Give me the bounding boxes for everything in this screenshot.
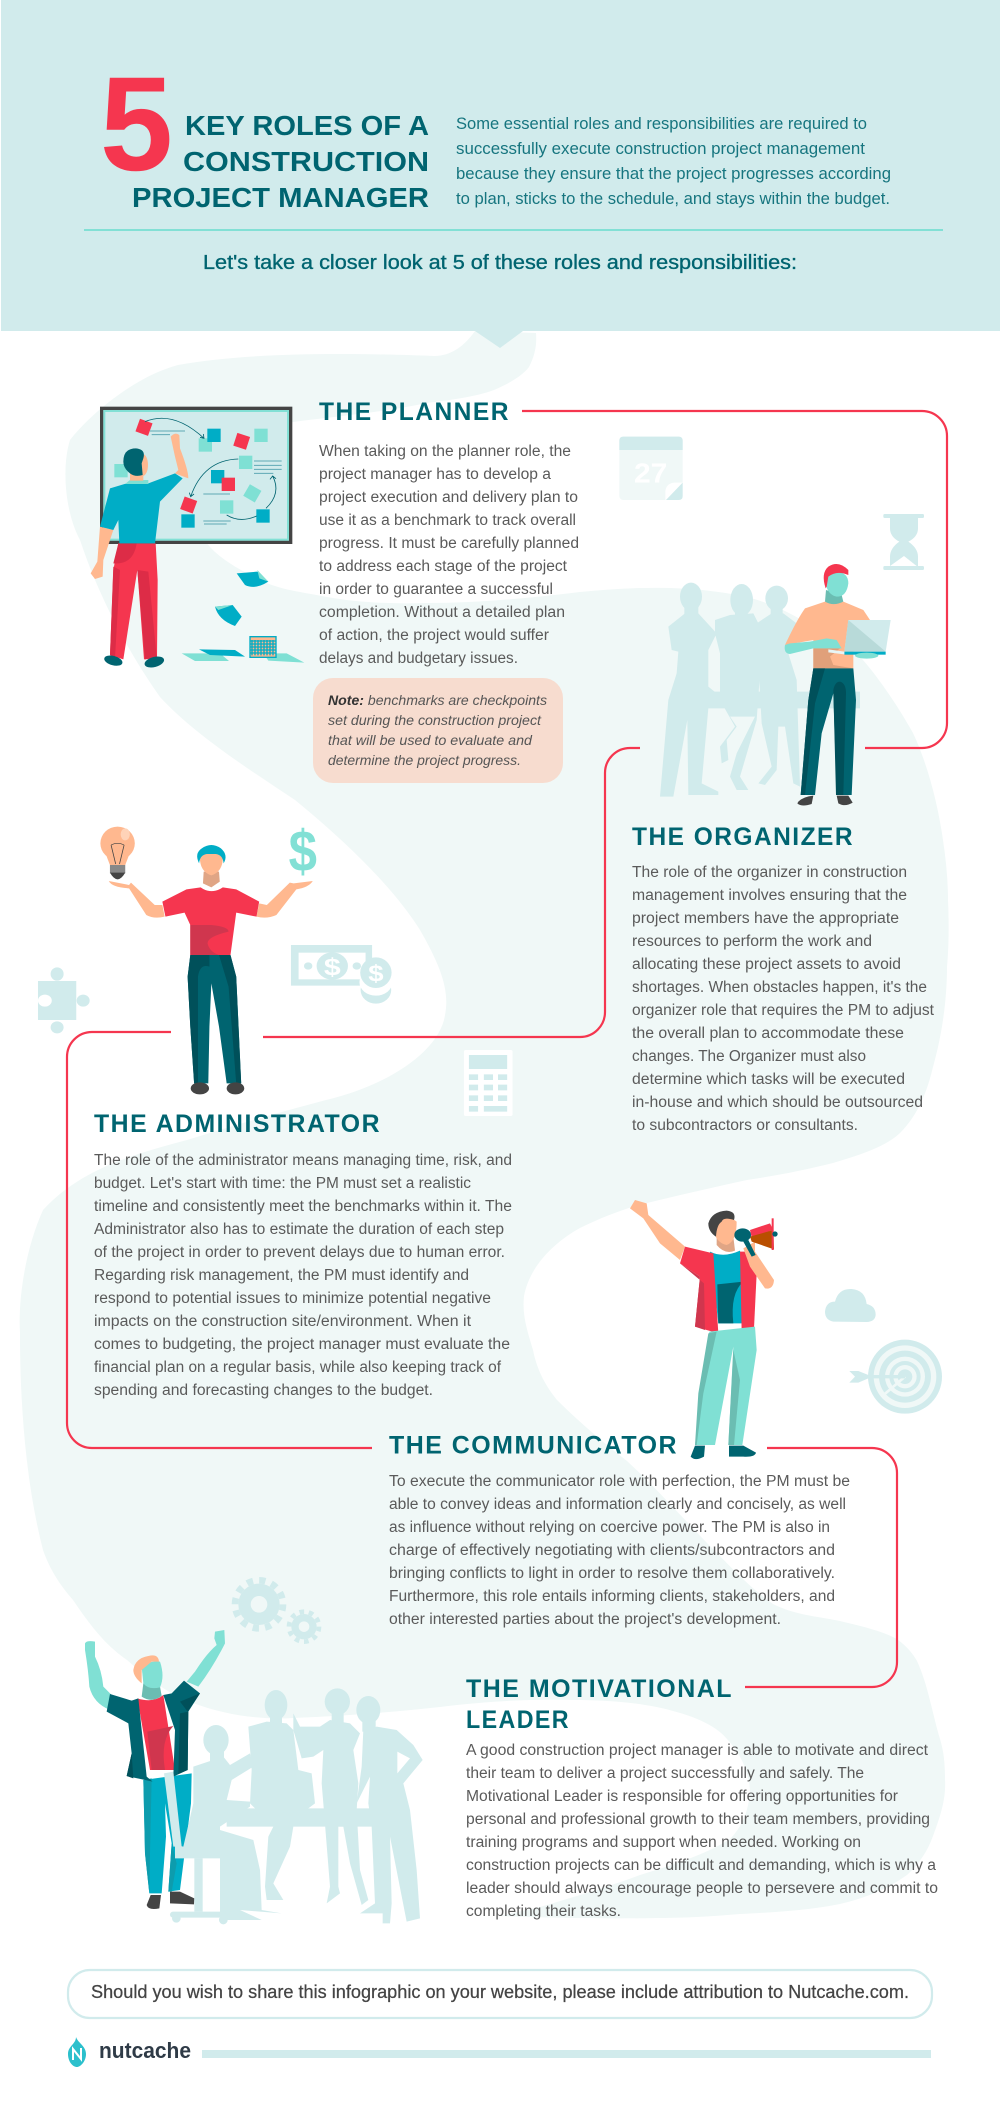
heading: the motivational leader: THE MOTIVATIONAL	[466, 1675, 733, 1703]
text: planner: delays and budgetary issues.	[319, 650, 518, 667]
text: administrator: The role of the administrator means managing time, risk, and	[94, 1152, 512, 1169]
icon: puzzle piece	[38, 967, 90, 1033]
heading: the planner: THE PLANNER	[319, 398, 510, 426]
callout: note: that will be used to evaluate and	[328, 732, 533, 748]
icon: dollar sign: $	[289, 819, 317, 884]
text: administrator: Regarding risk management, the PM must identify and	[94, 1267, 469, 1284]
text: planner: use it as a benchmark to track overall	[319, 512, 576, 529]
text: communicator: charge of effectively negotiating with clients/subcontractors and	[389, 1542, 835, 1559]
figure: organizer	[785, 564, 891, 806]
text: motivational leader: personal and professional growth to their team members, providing	[466, 1811, 930, 1828]
text: administrator	[94, 1152, 512, 1399]
text: planner	[319, 443, 579, 667]
text: organizer: organizer role that requires the PM to adjust	[632, 1002, 935, 1019]
text: organizer: management involves ensuring that the	[632, 887, 907, 904]
text: motivational leader	[466, 1742, 938, 1920]
text: administrator: budget. Let's start with time: the PM must set a realistic	[94, 1175, 471, 1192]
illustration: motivational leader group	[85, 1580, 423, 1924]
illustration: communicator group	[630, 1200, 942, 1459]
silhouettes: team	[660, 583, 860, 797]
text: motivational leader: training programs and support when needed. Working on	[466, 1834, 861, 1851]
text: communicator	[389, 1473, 850, 1628]
subtitle: Let's take a closer look at 5 of these roles and responsibilities:	[203, 252, 797, 274]
title: KEY ROLES OF A	[185, 110, 429, 141]
text: motivational leader: their team to deliver a project successfully and safely. The	[466, 1765, 864, 1782]
callout: note: Note: benchmarks are checkpoints	[328, 692, 547, 708]
icon: calendar: 27	[634, 457, 667, 488]
intro paragraph: because they ensure that the project progresses according	[456, 164, 891, 183]
text: organizer: in-house and which should be outsourced	[632, 1094, 923, 1111]
text: motivational leader: Motivational Leader is responsible for offering opportunities for	[466, 1788, 898, 1805]
text: communicator: To execute the communicator role with perfection, the PM must be	[389, 1473, 850, 1490]
text: planner: When taking on the planner role, the	[319, 443, 571, 460]
illustration: planner at board	[91, 408, 304, 669]
figure: administrator	[109, 845, 313, 1094]
icon: money and coins: $	[324, 955, 341, 981]
icon: gears	[235, 1580, 319, 1642]
intro paragraph: to plan, sticks to the schedule, and stays within the budget.	[456, 189, 890, 208]
text: organizer: to subcontractors or consultants.	[632, 1117, 858, 1134]
background blob	[20, 331, 949, 1918]
intro paragraph: Some essential roles and responsibilities are required to	[456, 114, 867, 133]
text: planner: project manager has to develop a	[319, 466, 551, 483]
icon: money and coins: $	[368, 961, 384, 987]
text: planner: in order to guarantee a successful	[319, 581, 553, 598]
figure: communicator with megaphone	[630, 1200, 778, 1459]
illustration: organizer group	[619, 437, 924, 806]
attribution box: Should you wish to share this infographic on your website, please include attribution to Nutcache.com.	[91, 1982, 909, 2002]
logo wordmark: nutcache	[99, 2038, 191, 2063]
text: administrator: timeline and consistently meet the benchmarks within it. The	[94, 1198, 512, 1215]
icon: hourglass	[883, 514, 924, 570]
text: motivational leader: leader should always encourage people to persevere and commit to	[466, 1880, 938, 1897]
text: organizer: the overall plan to accommodate these	[632, 1025, 904, 1042]
heading: the motivational leader: LEADER	[466, 1706, 570, 1734]
connector: planner to organizer	[522, 411, 947, 748]
icon: nutcache logo	[68, 2037, 86, 2067]
callout: note: set during the construction project	[328, 712, 542, 728]
text: administrator: respond to potential issues to minimize potential negative	[94, 1290, 491, 1307]
text: organizer: changes. The Organizer must also	[632, 1048, 866, 1065]
connector: administrator to communicator	[67, 1032, 372, 1448]
silhouettes: team at table	[164, 1688, 423, 1924]
text: organizer	[632, 864, 935, 1134]
title	[132, 110, 429, 213]
intro paragraph	[456, 114, 891, 208]
header band	[1, 0, 1000, 348]
text: planner: of action, the project would suffer	[319, 627, 549, 644]
heading: the organizer: THE ORGANIZER	[632, 823, 854, 851]
text: communicator: able to convey ideas and information clearly and concisely, as well	[389, 1496, 846, 1513]
text: organizer: shortages. When obstacles happen, it's the	[632, 979, 927, 996]
text: organizer: allocating these project assets to avoid	[632, 956, 901, 973]
text: planner: to address each stage of the project	[319, 558, 568, 575]
icon: cloud	[825, 1289, 876, 1322]
text: administrator: impacts on the construction site/environment. When it	[94, 1313, 472, 1330]
intro paragraph: successfully execute construction project management	[456, 139, 865, 158]
text: administrator: financial plan on a regular basis, while also keeping track of	[94, 1359, 502, 1376]
text: organizer: The role of the organizer in construction	[632, 864, 907, 881]
text: motivational leader: completing their tasks.	[466, 1903, 621, 1920]
icon: target with arrow	[849, 1340, 942, 1414]
text: administrator: of the project in order to prevent delays due to human error.	[94, 1244, 505, 1261]
heading: the motivational leader	[466, 1675, 733, 1734]
illustration: administrator group	[38, 819, 513, 1116]
callout: note	[313, 678, 563, 783]
attribution box	[68, 1970, 932, 2018]
text: communicator: as influence without relying on coercive power. The PM is also in	[389, 1519, 830, 1536]
text: communicator: bringing conflicts to light in order to resolve them collaboratively.	[389, 1565, 835, 1582]
text: motivational leader: construction projects can be difficult and demanding, which is why a	[466, 1857, 936, 1874]
text: communicator: other interested parties about the project's development.	[389, 1611, 781, 1628]
text: motivational leader: A good construction project manager is able to motivate and direct	[466, 1742, 929, 1759]
connector: organizer to administrator	[263, 748, 640, 1037]
callout: note: determine the project progress.	[328, 752, 521, 768]
text: administrator: spending and forecasting changes to the budget.	[94, 1382, 433, 1399]
title numeral 5: 5	[100, 50, 173, 199]
text: organizer: project members have the appropriate	[632, 910, 899, 927]
figure: motivational leader	[85, 1630, 225, 1909]
text: communicator: Furthermore, this role entails informing clients, stakeholders, and	[389, 1588, 835, 1605]
heading: the communicator: THE COMMUNICATOR	[389, 1432, 678, 1460]
text: administrator: Administrator also has to estimate the duration of each step	[94, 1221, 504, 1238]
connector: communicator to motivational leader	[745, 1448, 897, 1687]
title: CONSTRUCTION	[183, 146, 429, 177]
icon: calculator	[464, 1050, 513, 1116]
icon: calendar	[619, 437, 683, 500]
title: PROJECT MANAGER	[132, 182, 429, 213]
text: organizer: resources to perform the work and	[632, 933, 872, 950]
icon: light bulb	[100, 827, 135, 879]
text: planner: project execution and delivery plan to	[319, 489, 578, 506]
icon: money and coins	[291, 945, 392, 1004]
text: planner: progress. It must be carefully planned	[319, 535, 579, 552]
text: administrator: comes to budgeting, the project manager must evaluate the	[94, 1336, 510, 1353]
text: planner: completion. Without a detailed plan	[319, 604, 565, 621]
text: organizer: determine which tasks will be executed	[632, 1071, 905, 1088]
heading: the administrator: THE ADMINISTRATOR	[94, 1110, 381, 1138]
